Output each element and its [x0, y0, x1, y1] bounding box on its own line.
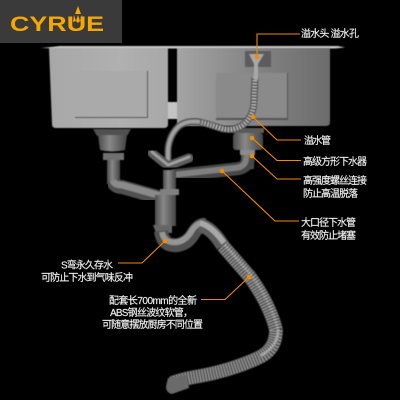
- label: hose: 可随意摆放厨房不同位置: [102, 318, 203, 331]
- hose end cuff: [166, 375, 189, 394]
- corrugated drain hose: [166, 223, 278, 394]
- callout dots: [163, 55, 259, 279]
- left basin label panel: [73, 71, 148, 118]
- sink rim: [41, 46, 345, 48]
- basin divider: [168, 102, 180, 119]
- logo: [0, 0, 122, 43]
- overflow head bracket: [245, 51, 271, 80]
- right basin: [177, 48, 330, 126]
- callout lines: [118, 34, 301, 300]
- right drain pipe: [172, 158, 248, 176]
- Y connector: [152, 152, 189, 166]
- label: hose: ABS钢丝波纹软管，: [110, 306, 193, 319]
- label: wide pipe: [301, 216, 356, 242]
- label: hose: 配套长700mm的全新: [109, 294, 197, 307]
- logo: CYRUE: [10, 13, 104, 36]
- right basin label panel: [216, 73, 288, 120]
- label: S trap: [41, 258, 133, 284]
- label: overflow head: 溢水头 溢水孔: [301, 27, 359, 40]
- label: S trap: S弯永久存水: [61, 258, 113, 272]
- S trap: [153, 170, 205, 245]
- left drain pipe: [113, 180, 161, 198]
- left drain: [93, 129, 131, 184]
- sink: [41, 46, 345, 128]
- label: S trap: 可防止下水到气味反冲: [41, 271, 133, 284]
- right drain: [232, 128, 264, 169]
- label: screw connection: [303, 174, 367, 200]
- label: wide pipe: 有效防止堵塞: [301, 229, 356, 242]
- label: screw connection: 防止高温脱落: [303, 187, 358, 200]
- label: wide pipe: 大口径下水管: [301, 216, 356, 229]
- overflow hose: [168, 77, 255, 167]
- label: hose: [102, 294, 203, 331]
- label: overflow pipe: 溢水管: [304, 134, 331, 147]
- label: screw connection: 高强度螺丝连接: [303, 174, 367, 187]
- left basin: [49, 48, 168, 128]
- label: drain: 高级方形下水器: [303, 155, 367, 168]
